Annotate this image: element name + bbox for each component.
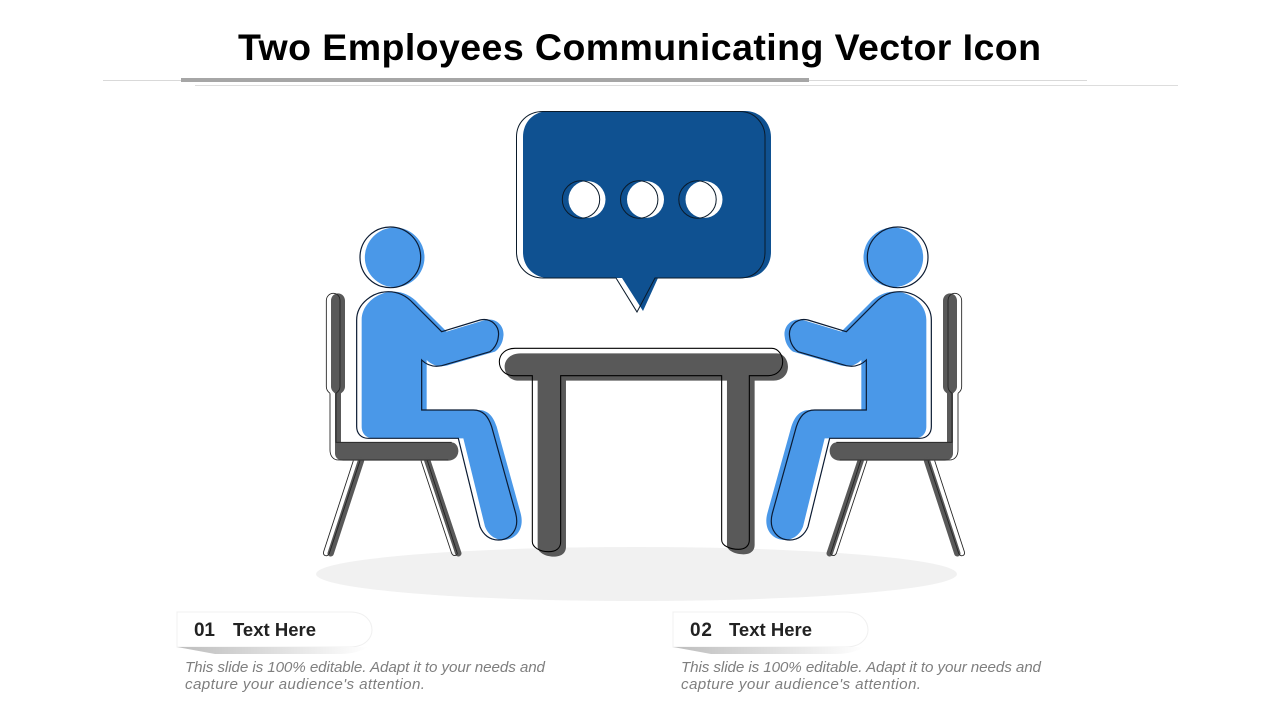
pill 02 — [673, 612, 868, 654]
description 01 — [185, 659, 546, 693]
number 01: 01 — [194, 620, 215, 641]
right employee outline — [771, 227, 931, 540]
floor shadow ellipse — [316, 547, 957, 601]
icon: speech bubble — [516, 111, 771, 312]
description 02: This slide is 100% editable. Adapt it to your needs and — [681, 659, 1042, 676]
table fill — [505, 353, 788, 557]
description 02: capture your audience's attention. — [681, 676, 921, 693]
left employee outline — [357, 227, 517, 540]
label block 02 — [673, 612, 1042, 693]
number 02: 02 — [690, 620, 712, 641]
heading 01: Text Here — [233, 619, 316, 640]
description 01: This slide is 100% editable. Adapt it to your needs and — [185, 659, 546, 676]
table outline — [499, 348, 783, 552]
description 02 — [681, 659, 1042, 693]
bubble fill — [523, 111, 771, 311]
left chair fill — [331, 293, 458, 553]
pill 01 — [177, 612, 372, 654]
icon: left employee with chair — [324, 227, 522, 556]
left employee body fill — [362, 227, 522, 540]
right chair fill — [830, 293, 957, 553]
left chair outline — [324, 293, 457, 556]
heading 02: Text Here — [729, 619, 812, 640]
bubble outline — [516, 112, 765, 312]
icon: right employee with chair — [766, 227, 964, 556]
icon: table — [499, 348, 788, 557]
title underline rules — [103, 78, 1178, 86]
title: Two Employees Communicating Vector Icon — [238, 26, 1041, 68]
typing dots — [562, 181, 722, 218]
right chair outline — [831, 293, 964, 556]
description 01: capture your audience's attention. — [185, 676, 425, 693]
right employee body fill — [766, 227, 926, 540]
label block 01 — [177, 612, 546, 693]
